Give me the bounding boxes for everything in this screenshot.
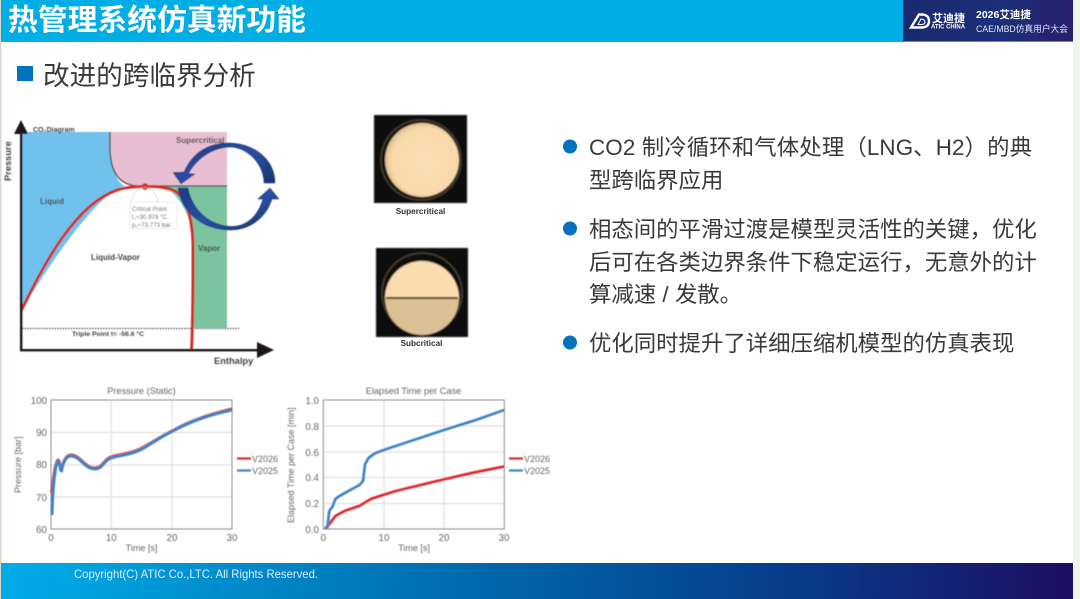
critical point callout — [130, 187, 177, 229]
axes — [14, 120, 274, 358]
legend — [509, 454, 550, 476]
chart: elapsed time: Elapsed Time per Case [min] — [286, 407, 296, 523]
diagram labels: Triple Point t= -56.6 °C — [72, 330, 144, 338]
saturation dome — [21, 186, 193, 350]
bullet list — [563, 135, 1037, 356]
title: 热管理系统仿真新功能 — [8, 4, 306, 37]
critical point callout: Critical Point — [132, 206, 167, 213]
chart: elapsed time: 0.2 — [305, 499, 319, 510]
chart: elapsed time: 30 — [499, 533, 510, 544]
region: vapor — [165, 186, 227, 328]
header bar — [1, 0, 1073, 42]
photo: subcritical — [376, 248, 468, 337]
caption: supercritical: Supercritical — [396, 207, 445, 216]
legend: V2026 — [524, 454, 550, 464]
chart: pressure — [13, 386, 278, 553]
chart: elapsed time: 10 — [379, 533, 390, 544]
diagram labels: Liquid-Vapor — [91, 253, 140, 262]
phase boundary line — [110, 132, 227, 186]
legend: V2025 — [252, 466, 278, 476]
conference logo: 艾迪捷 — [932, 11, 965, 25]
chart: pressure: 100 — [31, 396, 48, 407]
critical point callout: p꜀=73.773 bar — [132, 222, 171, 229]
chart: elapsed time: 0.6 — [305, 448, 320, 459]
chart: elapsed time: Elapsed Time per Case — [366, 386, 461, 396]
copyright: Copyright(C) ATIC Co.,LTC. All Rights Reserved. — [74, 567, 318, 581]
chart: pressure: 20 — [167, 533, 178, 544]
critical point marker — [142, 183, 148, 190]
critical point callout: t꜀=30.978 °C — [132, 214, 168, 221]
chart: elapsed time: 0 — [321, 533, 327, 544]
chart: pressure: 10 — [106, 533, 117, 544]
chart: elapsed time: 0.4 — [305, 473, 320, 484]
conference logo — [903, 0, 1073, 41]
section heading: 改进的跨临界分析 — [43, 61, 256, 91]
chart: elapsed time: 0.0 — [305, 525, 320, 536]
chart: pressure: 0 — [48, 533, 54, 544]
chart: elapsed time: 1.0 — [305, 396, 320, 407]
diagram labels: Enthalpy — [214, 356, 254, 366]
chart: elapsed time: 0.8 — [305, 422, 320, 433]
diagram labels: Pressure — [3, 141, 13, 181]
chart: pressure: 60 — [36, 525, 48, 536]
chart: pressure: 90 — [36, 428, 48, 439]
chart: pressure: 30 — [227, 533, 238, 544]
caption: subcritical: Subcritical — [401, 339, 442, 348]
legend: V2025 — [524, 466, 550, 476]
chart: pressure: Pressure (Static) — [107, 386, 176, 396]
chart: elapsed time: Time [s] — [398, 543, 430, 553]
chart: pressure: Pressure [bar] — [13, 436, 23, 493]
cycle arrow lower — [178, 188, 279, 230]
legend: V2026 — [252, 454, 278, 464]
CO2 phase diagram — [3, 120, 279, 366]
photo: supercritical — [374, 115, 467, 203]
bullet 1: 型跨临界应用 — [589, 168, 723, 193]
diagram labels: Vapor — [198, 244, 220, 253]
legend — [237, 454, 278, 476]
diagram labels — [3, 127, 254, 366]
icon: ATIC logo mark — [911, 14, 929, 28]
conference logo: CAE/MBD仿真用户大会 — [976, 23, 1068, 34]
triple point line — [22, 328, 239, 330]
region: liquid — [21, 132, 125, 311]
chart: pressure: 80 — [36, 460, 48, 471]
conference logo: ATIC CHINA — [931, 24, 966, 30]
footer bar — [1, 563, 1073, 599]
conference logo: 2026艾迪捷 — [976, 8, 1031, 21]
bullet 1 — [563, 135, 1032, 193]
bullet 2: 后可在各类边界条件下稳定运行，无意外的计 — [589, 250, 1037, 275]
diagram labels: Supercritical — [176, 136, 224, 145]
chart: pressure: Time [s] — [126, 543, 157, 553]
bullet 1: CO2 制冷循环和气体处理（LNG、H2）的典 — [589, 135, 1032, 160]
diagram labels: Liquid — [40, 197, 64, 206]
bullet 2: 算减速 / 发散。 — [589, 282, 742, 307]
bullet 2: 相态间的平滑过渡是模型灵活性的关键，优化 — [589, 217, 1037, 242]
chart: elapsed time — [286, 386, 550, 553]
cycle arrow upper — [173, 143, 275, 184]
bullet 3: 优化同时提升了详细压缩机模型的仿真表现 — [589, 331, 1014, 356]
region: supercritical — [110, 132, 227, 186]
bullet 2 — [563, 217, 1037, 307]
chart: elapsed time: 20 — [439, 533, 450, 544]
diagram labels: CO₂Diagram — [33, 127, 75, 134]
chart: pressure: 70 — [36, 493, 48, 504]
